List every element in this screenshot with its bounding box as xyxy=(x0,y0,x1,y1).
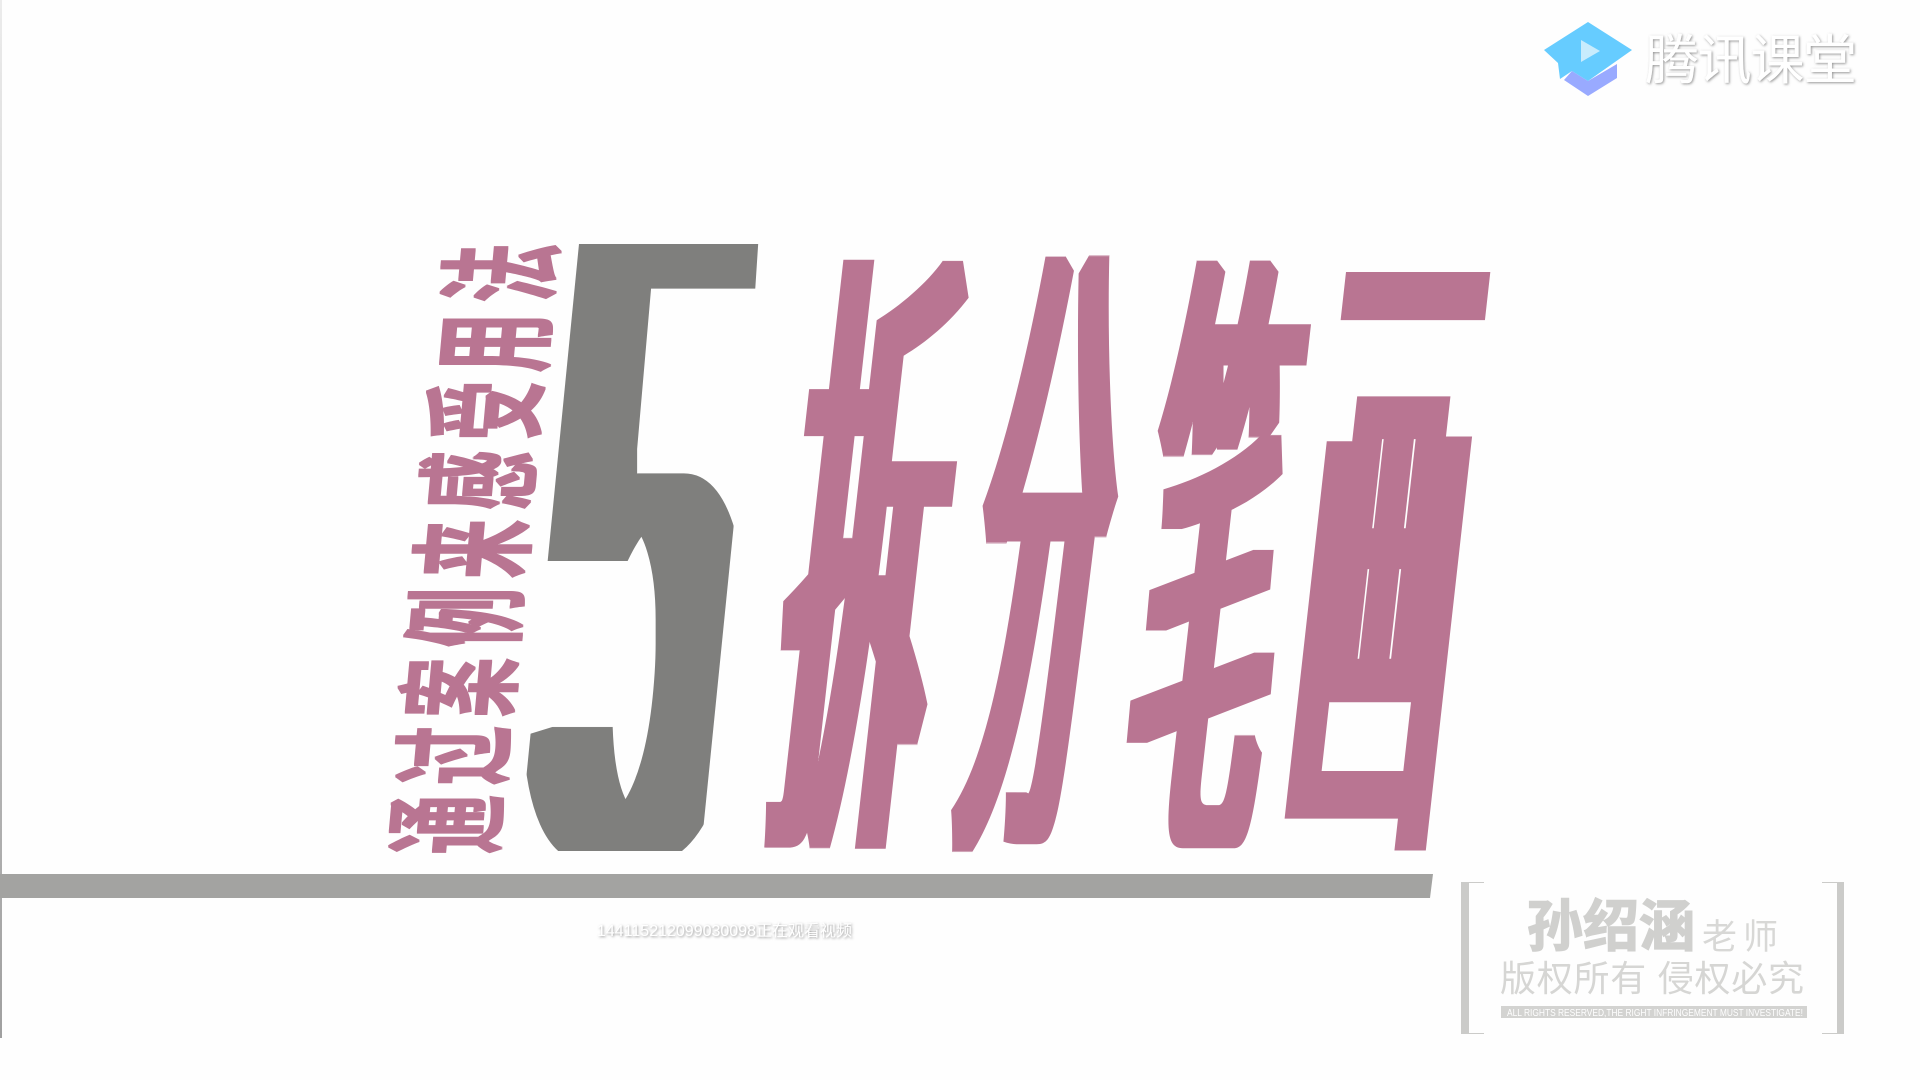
big numeral 5: 5 xyxy=(517,33,770,1062)
glyph 过: 过 xyxy=(385,726,533,785)
glyph 案: 案 xyxy=(390,658,538,717)
english notice bar xyxy=(1501,1006,1807,1018)
logo: Tencent Classroom xyxy=(1544,22,1857,96)
left edge shadow xyxy=(0,0,2,1038)
icon: graduation cap lower xyxy=(1564,64,1617,96)
english notice text: ALL RIGHTS RESERVED,THE RIGHT INFRINGEMENT MUST INVESTIGATE! xyxy=(1507,1008,1803,1019)
main title: 拆分笔画 xyxy=(751,184,1504,944)
copyright statement: 版权所有 侵权必究 xyxy=(1500,958,1804,999)
logo wordmark: 腾讯课堂 xyxy=(1645,31,1857,91)
glyph 分: 分 xyxy=(939,201,1146,938)
icon: graduation cap top xyxy=(1544,22,1632,81)
viewer watermark: 144115212099030098正在观看视频 xyxy=(597,922,852,940)
glyph 画: 画 xyxy=(1267,184,1504,944)
glyph 法: 法 xyxy=(432,244,580,302)
left bracket xyxy=(1461,882,1484,1034)
glyph 用: 用 xyxy=(424,314,572,372)
copyright stamp xyxy=(1461,882,1844,1034)
teacher title: 老师 xyxy=(1702,918,1778,957)
glyph 例: 例 xyxy=(396,588,544,647)
glyph 通: 通 xyxy=(377,795,525,854)
glyph 笔: 笔 xyxy=(1106,222,1321,939)
glyph 来: 来 xyxy=(404,520,552,578)
baseline bar xyxy=(0,874,1433,898)
side caption: 通过案例来感受用法 xyxy=(377,244,580,854)
icon: play triangle xyxy=(1581,40,1600,62)
glyph 受: 受 xyxy=(417,381,565,440)
glyph 拆: 拆 xyxy=(751,217,981,936)
teacher name: 孙绍涵 xyxy=(1527,895,1695,958)
right bracket xyxy=(1822,882,1844,1034)
glyph 感: 感 xyxy=(410,451,558,510)
